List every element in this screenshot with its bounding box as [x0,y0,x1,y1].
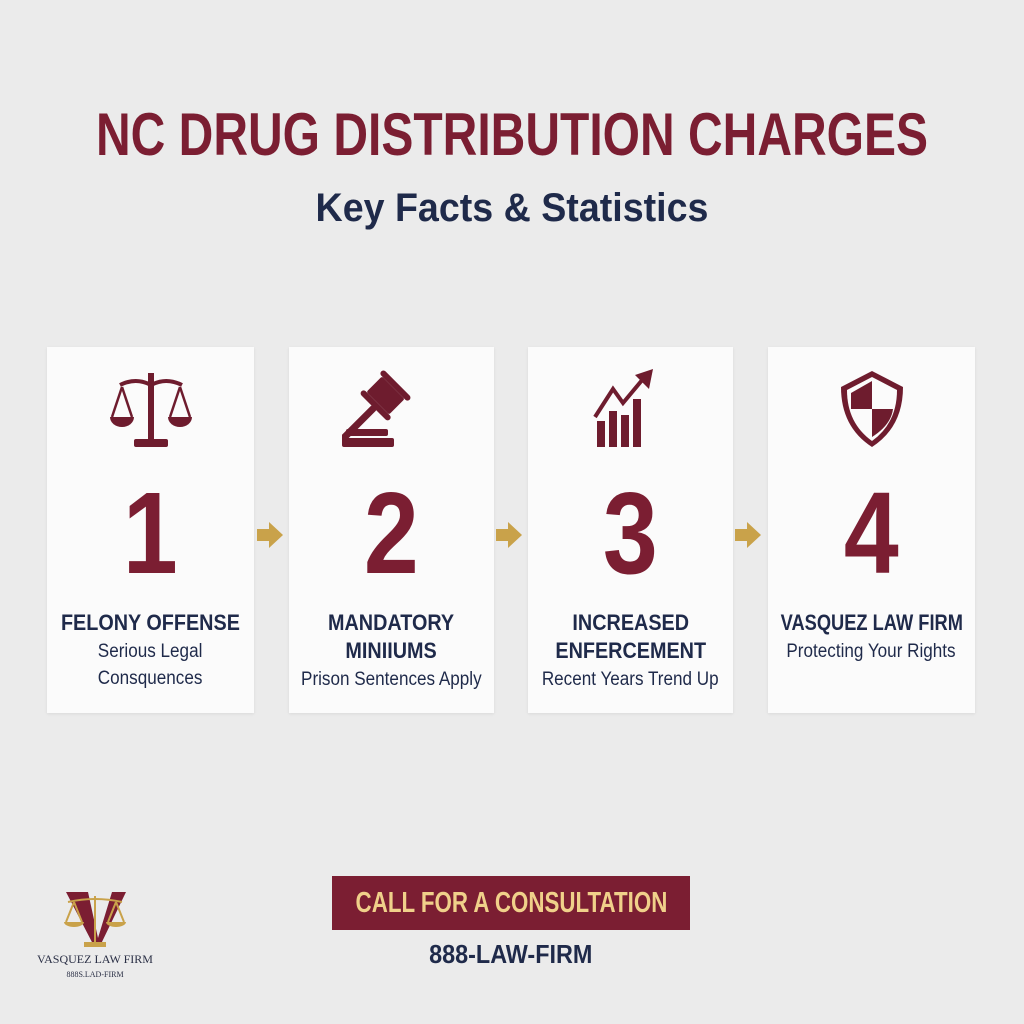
CTA button: CALL FOR A CONSULTATION [355,887,667,919]
heading: FELONY OFFENSE [61,610,240,635]
heading: VASQUEZ LAW FIRM [780,610,963,635]
title: NC DRUG DISTRIBUTION CHARGES [96,101,928,168]
icon: scales [110,373,192,447]
number 1: 1 [123,468,178,598]
CTA button [332,876,690,930]
number 3: 3 [603,468,658,598]
number 4: 4 [844,468,899,598]
panel: mandatory minimums [289,347,494,713]
logo [37,892,153,979]
logo text: 888S.LAD-FIRM [66,970,124,979]
panel: felony offense [47,347,254,713]
icon: rising chart [593,369,653,447]
heading: INCREASED [572,610,689,635]
heading: MANDATORY [328,610,455,635]
icon: shield [841,371,903,447]
icon: gavel [342,370,410,447]
number 2: 2 [364,468,419,598]
subtitle: Key Facts & Statistics [316,186,708,230]
icon: V with scales [64,892,126,947]
heading: MINIIUMS [346,638,437,663]
logo text: VASQUEZ LAW FIRM [37,952,153,966]
heading [555,610,706,663]
phone number: 888-LAW-FIRM [429,939,593,969]
heading [328,610,455,663]
description: Recent Years Trend Up [542,669,719,690]
arrow 1 [257,522,283,548]
panel: increased enforcement [528,347,733,713]
description: Serious Legal [98,641,203,662]
arrow 3 [735,522,761,548]
arrow 2 [496,522,522,548]
description [98,641,203,689]
logo text [37,952,153,979]
description: Consquences [98,668,203,689]
description: Protecting Your Rights [787,641,956,662]
panel: vasquez law firm [768,347,975,713]
heading: ENFERCEMENT [555,638,706,663]
description: Prison Sentences Apply [301,669,482,690]
